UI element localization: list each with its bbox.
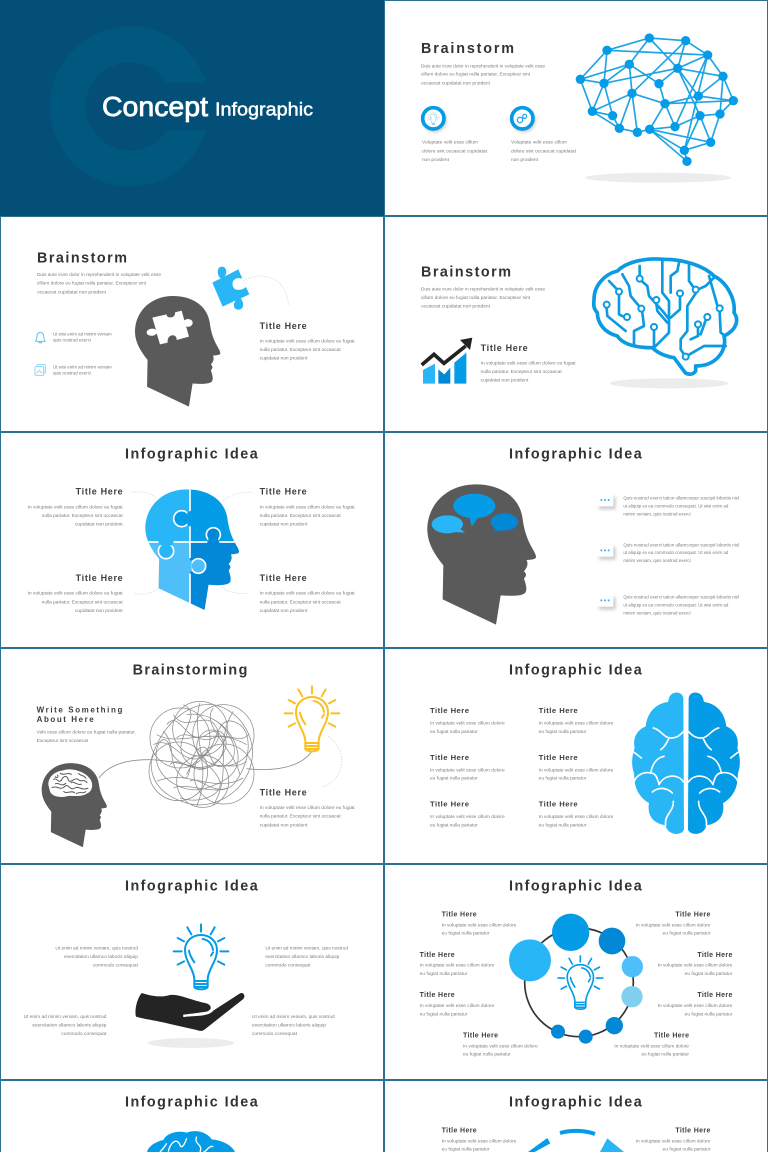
item three: Title Here bbox=[430, 753, 469, 762]
ring of circles bbox=[509, 914, 643, 1044]
caption left: dolore sint occaecat cupidatat bbox=[422, 148, 488, 153]
heading: Infographic Idea bbox=[509, 879, 643, 895]
intro text bbox=[421, 63, 545, 85]
bottom right body: cupidatat non proident bbox=[260, 608, 308, 613]
message text three bbox=[623, 595, 739, 616]
left label: Title Here bbox=[442, 1127, 477, 1134]
head with puzzle cut-out bbox=[135, 296, 220, 407]
item six bbox=[539, 800, 614, 827]
network brain bbox=[576, 33, 738, 166]
hand shadow bbox=[148, 1038, 234, 1048]
top left body bbox=[28, 504, 123, 527]
subheading: About Here bbox=[37, 715, 94, 724]
slide: brainstorming tangle bbox=[0, 648, 383, 863]
label group right one: eu fugiat nulla pariatur bbox=[663, 931, 711, 936]
message text one: ut aliquip ex ea commodo consequat. Ut wisi enim ad bbox=[623, 504, 729, 509]
message text two bbox=[623, 542, 739, 563]
slide: brainstorm circuit brain bbox=[384, 216, 767, 431]
circuit brain bbox=[594, 259, 737, 374]
item text one bbox=[53, 331, 112, 342]
label group left two bbox=[420, 952, 495, 976]
message text one: minim veniam, quis nostrud exerci bbox=[623, 512, 691, 517]
dashed connector bbox=[243, 276, 289, 306]
intro text: Excepteur sint occaecat bbox=[37, 738, 89, 743]
text top left bbox=[55, 946, 139, 968]
icon: gears badge bbox=[512, 108, 536, 132]
item two: eu fugiat nulla pariatur bbox=[539, 729, 587, 734]
cover title: Concept bbox=[102, 91, 208, 122]
slide: circle diagram bbox=[384, 864, 767, 1079]
bottom left body: cupidatat non proident bbox=[75, 608, 123, 613]
item text two: quis nostrud exerci bbox=[53, 371, 91, 376]
body: nulla pariatur. Excepteur sint occaecat bbox=[481, 369, 562, 374]
title: Title Here bbox=[260, 788, 307, 798]
label group right two: Title Here bbox=[697, 952, 732, 959]
brain with folds bbox=[147, 1131, 235, 1152]
label group right two: eu fugiat nulla pariatur bbox=[685, 971, 733, 976]
label group left two: eu fugiat nulla pariatur bbox=[420, 971, 468, 976]
caption left: Voluptate velit esse cillum bbox=[422, 140, 478, 145]
message text one bbox=[623, 496, 739, 517]
text top right bbox=[265, 946, 348, 968]
bottom left body: In voluptate velit esse cillum dolore eu fugiat bbox=[28, 591, 123, 596]
bottom left body bbox=[28, 591, 123, 613]
left label: eu fugiat nulla pariatur bbox=[442, 1147, 490, 1152]
body: cupidatat non proident bbox=[481, 378, 529, 383]
label group left three: eu fugiat nulla pariatur bbox=[420, 1011, 468, 1016]
body: In voluptate velit esse cillum dolore eu fugiat bbox=[260, 805, 355, 810]
label group left one: eu fugiat nulla pariatur bbox=[442, 931, 490, 936]
message text three: minim veniam, quis nostrud exerci bbox=[623, 611, 691, 616]
brain shadow bbox=[585, 173, 731, 183]
slide: brainstorm network brain bbox=[384, 0, 767, 215]
head silhouette with bubbles bbox=[427, 484, 536, 625]
body: nulla pariatur. Excepteur sint occaecat bbox=[260, 814, 341, 819]
intro text: Duis aute irure dolor in reprehenderit in voluptate velit esse bbox=[421, 63, 545, 68]
cover watermark letter C bbox=[50, 26, 206, 186]
head with brain bbox=[42, 763, 107, 847]
caption right bbox=[511, 140, 577, 162]
top left body: cupidatat non proident bbox=[75, 522, 123, 527]
title: Title Here bbox=[260, 321, 307, 331]
label group right two bbox=[658, 952, 733, 976]
item three bbox=[430, 753, 505, 781]
title: Title Here bbox=[481, 343, 528, 353]
body: cupidatat non proident bbox=[260, 822, 308, 827]
left label: In voluptate velit esse cillum dolore bbox=[442, 1138, 517, 1143]
left label bbox=[442, 1127, 517, 1152]
bottom right body: nulla pariatur. Excepteur sint occaecat bbox=[260, 599, 341, 604]
item text one: Ut wisi enim ad minim veniam bbox=[53, 331, 112, 336]
item two bbox=[539, 706, 614, 734]
item four: Title Here bbox=[539, 753, 578, 762]
label group left two: In voluptate velit esse cillum dolore bbox=[420, 963, 495, 968]
item five: eu fugiat nulla pariatur bbox=[430, 822, 478, 827]
icon: bell bbox=[36, 332, 45, 343]
label group right four bbox=[614, 1033, 689, 1057]
bottom right title: Title Here bbox=[260, 573, 307, 583]
top right body: cupidatat non proident bbox=[260, 522, 308, 527]
body bbox=[260, 338, 355, 361]
text bottom right: Ut enim ad minim veniam, quis nostrud bbox=[252, 1014, 335, 1019]
label group right three: In voluptate velit esse cillum dolore bbox=[658, 1003, 733, 1008]
body bbox=[481, 360, 576, 383]
heading: Infographic Idea bbox=[125, 1095, 259, 1111]
label group right two: In voluptate velit esse cillum dolore bbox=[658, 963, 733, 968]
icon: blue lightbulb bbox=[174, 924, 228, 989]
bottom left title: Title Here bbox=[76, 573, 123, 583]
brain top view bbox=[632, 692, 740, 834]
subheading bbox=[37, 705, 122, 724]
text bottom right: exercitation ullamco laboris aliquip bbox=[252, 1022, 326, 1027]
label group right three: Title Here bbox=[697, 992, 732, 999]
text bottom left: Ut enim ad minim veniam, quis nostrud bbox=[24, 1014, 107, 1019]
slide: hand with lightbulb bbox=[0, 864, 383, 1079]
caption left: non proident bbox=[422, 157, 450, 162]
label group left four bbox=[463, 1033, 538, 1057]
slide: brain cropped bbox=[0, 1080, 384, 1152]
intro text bbox=[37, 730, 136, 743]
heading: Brainstorm bbox=[421, 41, 514, 57]
right label: Title Here bbox=[675, 1127, 710, 1134]
caption right: non proident bbox=[511, 157, 539, 162]
message text three: ut aliquip ex ea commodo consequat. Ut wisi enim ad bbox=[623, 603, 729, 608]
message text two: Quis nostrud exerci tation ullamcorper suscipit lobortis nisl bbox=[623, 542, 739, 547]
dashed connector bbox=[322, 736, 342, 787]
heading: Infographic Idea bbox=[125, 447, 259, 463]
message text two: minim veniam, quis nostrud exerci bbox=[623, 558, 691, 563]
item text one: quis nostrud exerci bbox=[53, 337, 91, 342]
string from tangle to bulb bbox=[247, 751, 312, 770]
label group left one: In voluptate velit esse cillum dolore bbox=[442, 922, 517, 927]
heading: Infographic Idea bbox=[125, 879, 259, 895]
slide: top view brain bbox=[384, 648, 767, 863]
text bottom right: commodo consequat bbox=[252, 1031, 298, 1036]
heading: Brainstorming bbox=[133, 663, 247, 679]
icon: yellow lightbulb bbox=[285, 686, 339, 751]
cover title: Infographic bbox=[215, 100, 313, 120]
top right body: nulla pariatur. Excepteur sint occaecat bbox=[260, 513, 341, 518]
body: In voluptate velit esse cillum dolore eu fugiat bbox=[260, 338, 355, 343]
icon: image cards bbox=[35, 365, 45, 375]
right label bbox=[636, 1127, 711, 1152]
body bbox=[260, 805, 355, 827]
text bottom right bbox=[252, 1014, 335, 1036]
label group left one: Title Here bbox=[442, 911, 477, 918]
item two: In voluptate velit esse cillum dolore bbox=[539, 720, 614, 725]
label group left four: Title Here bbox=[463, 1033, 498, 1040]
top left title: Title Here bbox=[76, 487, 123, 497]
label group right four: eu fugiat nulla pariatur bbox=[641, 1052, 689, 1057]
top right body bbox=[260, 504, 355, 527]
bottom right body bbox=[260, 591, 355, 613]
text bottom left bbox=[24, 1014, 107, 1036]
hand bbox=[135, 993, 244, 1031]
label group left four: In voluptate velit esse cillum dolore bbox=[463, 1043, 538, 1048]
right label: eu fugiat nulla pariatur bbox=[663, 1147, 711, 1152]
intro text: cillum dolore eu fugiat nulla pariatur. Excepteur sint bbox=[421, 72, 531, 77]
item text two: Ut wisi enim ad minim veniam bbox=[53, 365, 112, 370]
text bottom left: commodo consequat bbox=[61, 1031, 107, 1036]
slide: puzzle head bbox=[0, 432, 383, 647]
icon: message two bbox=[597, 545, 616, 560]
intro text: occaecat cupidatat non proident bbox=[421, 80, 491, 85]
item one: In voluptate velit esse cillum dolore bbox=[430, 720, 505, 725]
slide: pie ring cropped bbox=[384, 1080, 768, 1152]
intro text: Duis aute irure dolor in reprehenderit in voluptate velit esse bbox=[421, 286, 545, 291]
icon: center lightbulb bbox=[558, 956, 603, 1009]
intro text: cillum dolore eu fugiat nulla pariatur. Excepteur sint bbox=[421, 295, 531, 300]
item two: Title Here bbox=[539, 706, 578, 715]
heading: Infographic Idea bbox=[509, 447, 643, 463]
item four: eu fugiat nulla pariatur bbox=[539, 776, 587, 781]
label group right one bbox=[636, 911, 711, 936]
text top left: Ut enim ad minim veniam, quis nostrud bbox=[55, 946, 138, 951]
intro text: occaecat cupidatat non proident bbox=[37, 289, 107, 294]
top left body: In voluptate velit esse cillum dolore eu fugiat bbox=[28, 504, 123, 509]
intro text: cillum dolore eu fugiat nulla pariatur. Excepteur sint bbox=[37, 281, 147, 286]
item text two bbox=[53, 365, 112, 376]
heading: Brainstorm bbox=[421, 265, 511, 281]
string from head to tangle bbox=[99, 760, 200, 778]
intro text: Velit esse cillum dolore eu fugiat nulla pariatur. bbox=[37, 730, 136, 735]
item six: In voluptate velit esse cillum dolore bbox=[539, 814, 614, 819]
slide: head with speech bubbles bbox=[384, 432, 767, 647]
blue puzzle piece bbox=[212, 267, 249, 310]
body: cupidatat non proident bbox=[260, 356, 308, 361]
intro text: Duis aute irure dolor in reprehenderit in voluptate velit esse bbox=[37, 272, 161, 277]
bottom right body: In voluptate velit esse cillum dolore eu fugiat bbox=[260, 591, 355, 596]
item five bbox=[430, 800, 505, 827]
item one bbox=[430, 706, 505, 734]
text bottom left: exercitation ullamco laboris aliquip bbox=[32, 1022, 107, 1027]
dashed connectors bbox=[132, 492, 252, 594]
subheading: Write Something bbox=[37, 705, 122, 714]
message text three: Quis nostrud exerci tation ullamcorper suscipit lobortis nisl bbox=[623, 595, 739, 600]
label group left three: Title Here bbox=[420, 992, 455, 999]
item one: Title Here bbox=[430, 706, 469, 715]
message text two: ut aliquip ex ea commodo consequat. Ut wisi enim ad bbox=[623, 550, 729, 555]
intro text bbox=[37, 272, 161, 294]
text top right: exercitation ullamco laboris aliquip bbox=[265, 954, 340, 959]
top right title: Title Here bbox=[260, 487, 307, 497]
label group right one: In voluptate velit esse cillum dolore bbox=[636, 922, 711, 927]
label group left four: eu fugiat nulla pariatur bbox=[463, 1052, 511, 1057]
tangle scribble bbox=[149, 701, 254, 807]
caption right: Voluptate velit esse cillum bbox=[511, 140, 567, 145]
item three: In voluptate velit esse cillum dolore bbox=[430, 767, 505, 772]
caption right: dolore sint occaecat cupidatat bbox=[511, 148, 577, 153]
label group left two: Title Here bbox=[420, 952, 455, 959]
label group left three: In voluptate velit esse cillum dolore bbox=[420, 1003, 495, 1008]
heading: Infographic Idea bbox=[509, 663, 643, 679]
label group right four: In voluptate velit esse cillum dolore bbox=[614, 1043, 689, 1048]
right label: In voluptate velit esse cillum dolore bbox=[636, 1138, 711, 1143]
item six: Title Here bbox=[539, 800, 578, 809]
four piece head bbox=[145, 489, 240, 610]
body: In voluptate velit esse cillum dolore eu fugiat bbox=[481, 360, 576, 365]
cover title bbox=[102, 91, 313, 122]
ring segments bbox=[528, 1131, 624, 1152]
top right body: In voluptate velit esse cillum dolore eu fugiat bbox=[260, 504, 355, 509]
icon: lightbulb badge bbox=[423, 108, 447, 132]
label group right three bbox=[658, 992, 733, 1016]
item six: eu fugiat nulla pariatur bbox=[539, 822, 587, 827]
icon: message one bbox=[597, 494, 616, 509]
body: nulla pariatur. Excepteur sint occaecat bbox=[260, 347, 341, 352]
item four bbox=[539, 753, 614, 781]
heading: Brainstorm bbox=[37, 251, 127, 267]
intro text bbox=[421, 286, 545, 309]
heading: Infographic Idea bbox=[509, 1095, 643, 1111]
brain shadow bbox=[610, 378, 728, 388]
label group right three: eu fugiat nulla pariatur bbox=[685, 1011, 733, 1016]
growth chart icon bbox=[422, 338, 472, 384]
label group right four: Title Here bbox=[654, 1033, 689, 1040]
bottom left body: nulla pariatur. Excepteur sint occaecat bbox=[42, 599, 123, 604]
top left body: nulla pariatur. Excepteur sint occaecat bbox=[42, 513, 123, 518]
item three: eu fugiat nulla pariatur bbox=[430, 776, 478, 781]
slide: concept cover bbox=[0, 0, 385, 216]
item four: In voluptate velit esse cillum dolore bbox=[539, 767, 614, 772]
text top right: commodo consequat bbox=[265, 963, 311, 968]
item five: Title Here bbox=[430, 800, 469, 809]
icon: message three bbox=[597, 595, 616, 610]
caption left bbox=[422, 140, 488, 162]
label group left three bbox=[420, 992, 495, 1016]
slide: brainstorm head and puzzle bbox=[0, 216, 383, 431]
text top left: commodo consequat bbox=[93, 963, 139, 968]
label group right one: Title Here bbox=[675, 911, 710, 918]
text top right: Ut enim ad minim veniam, quis nostrud bbox=[265, 946, 348, 951]
label group left one bbox=[442, 911, 517, 936]
item five: In voluptate velit esse cillum dolore bbox=[430, 814, 505, 819]
intro text: occaecat cupidatat non proident bbox=[421, 304, 491, 309]
message text one: Quis nostrud exerci tation ullamcorper suscipit lobortis nisl bbox=[623, 496, 739, 501]
item one: eu fugiat nulla pariatur bbox=[430, 729, 478, 734]
text top left: exercitation ullamco laboris aliquip bbox=[64, 954, 138, 959]
